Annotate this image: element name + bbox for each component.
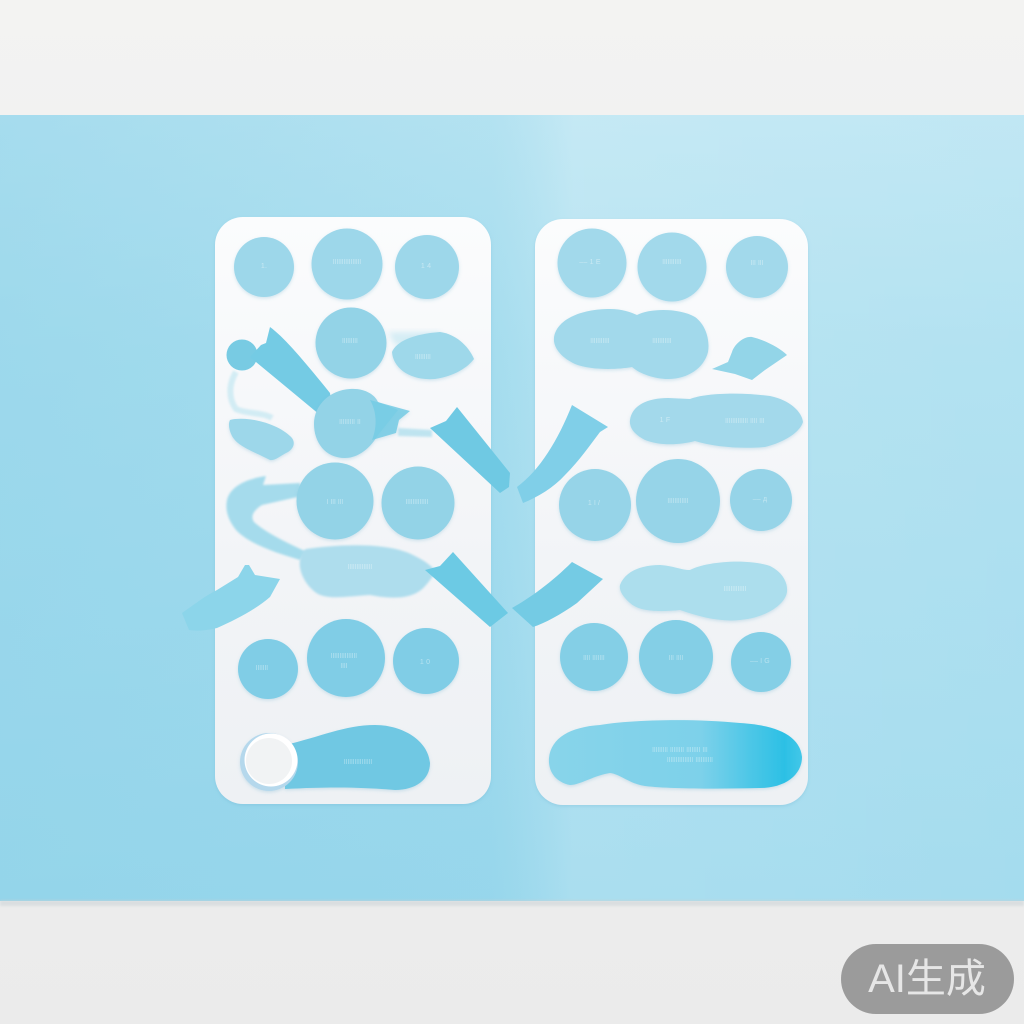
double blob: right card second row bbox=[554, 309, 708, 379]
tail: second row blur bbox=[388, 332, 440, 345]
badge: AI generated bbox=[841, 944, 1014, 1014]
pill with ring: left card bottom bbox=[240, 725, 430, 791]
circles: right card sixth row bbox=[560, 620, 791, 694]
leaf shape: left card second row bbox=[392, 332, 474, 379]
labels: right card fourth row: 1 l / bbox=[588, 500, 600, 507]
labels: left card sixth row: 1 0 bbox=[420, 659, 430, 666]
arrow band: left outer lower bbox=[182, 565, 280, 631]
pale blob: right card fifth row: lllllllllllll bbox=[724, 586, 747, 593]
labels: right card fourth row: –– д bbox=[753, 496, 767, 503]
pale blob: right card fifth row bbox=[620, 562, 787, 620]
circle: left card knob bbox=[226, 340, 258, 370]
labels: left card top row: 1. bbox=[261, 263, 267, 270]
arrow band: centre lower right bbox=[512, 562, 603, 627]
circles: right card top row bbox=[558, 228, 788, 302]
connector: left curled stem bbox=[230, 372, 272, 418]
labels: right card top row: lll lll bbox=[751, 260, 764, 267]
pill with ring: left card bottom: Illlllllllllllll bbox=[344, 759, 372, 766]
small leaf: right card second row bbox=[712, 337, 787, 380]
circles: right card fourth row bbox=[559, 459, 792, 543]
double pill: right card third row bbox=[630, 394, 803, 448]
circles: left card top row bbox=[234, 228, 459, 300]
arrow band: left card upper bbox=[250, 327, 332, 415]
labels: right card sixth row: –– l G bbox=[750, 658, 770, 665]
leaf shape: left card second row: lllllllll bbox=[415, 354, 431, 361]
labels: right card top row bbox=[579, 259, 764, 267]
labels: right card sixth row: llll lllllll bbox=[583, 655, 605, 662]
labels: left card sixth row bbox=[256, 653, 430, 672]
labels: left card fourth row: lllllllllllll bbox=[406, 499, 429, 506]
pale blob: left card fifth row bbox=[300, 545, 436, 598]
banner pill: right card bottom: lllllllllllllll llllllllll bbox=[667, 757, 713, 764]
labels: right card fourth row: llllllllllll bbox=[667, 498, 689, 505]
double pill: right card third row: lllllllllllll llll lll bbox=[725, 418, 765, 425]
badge: AI generated: AI生成 bbox=[868, 957, 986, 1001]
double blob: right card second row: lllllllllll bbox=[590, 338, 610, 345]
circle with tab: left card third row bbox=[314, 389, 410, 458]
double blob: right card second row: lllllllllll bbox=[652, 338, 672, 345]
labels: left card sixth row: lllllll bbox=[256, 665, 268, 672]
panel: right card bbox=[512, 219, 808, 805]
labels: right card sixth row: lll llll bbox=[669, 655, 683, 662]
labels: left card fourth row: l lll lll bbox=[327, 499, 344, 506]
labels: right card sixth row bbox=[583, 655, 770, 665]
tail: third row blur bbox=[398, 428, 432, 437]
circle with tab: left card third row: lllllllll ll bbox=[339, 419, 361, 426]
banner pill: right card bottom: lllllllll llllllll llllllll lll bbox=[652, 747, 708, 754]
swoosh: left card fourth row bbox=[226, 476, 307, 560]
arrow band: centre upper left bbox=[430, 407, 510, 493]
double pill: right card third row: 1 F bbox=[660, 417, 670, 424]
arrow band: centre upper right bbox=[517, 405, 608, 503]
blob: left card third row bbox=[229, 419, 294, 460]
labels: left card top row: 1 4 bbox=[421, 263, 431, 270]
labels: right card top row: lllllllllll bbox=[662, 259, 682, 266]
blue folded sheet bbox=[0, 115, 1024, 906]
circles: left card sixth row bbox=[238, 619, 459, 699]
circle: left card second row: lllllllll bbox=[342, 338, 358, 345]
pale blob: left card fifth row: llllllllllllll bbox=[348, 564, 373, 571]
arrow band: centre lower left bbox=[425, 552, 508, 627]
panel: left card bbox=[182, 217, 510, 804]
labels: right card fourth row bbox=[588, 496, 767, 507]
circles: left card fourth row bbox=[296, 462, 454, 540]
labels: left card top row: Illlllllllllllll bbox=[333, 259, 361, 266]
banner pill: right card bottom bbox=[549, 720, 802, 789]
circle: left card second row bbox=[316, 308, 386, 378]
labels: left card sixth row: llll bbox=[340, 663, 348, 670]
labels: left card fourth row bbox=[327, 499, 429, 506]
labels: right card top row: –– 1 E bbox=[579, 259, 601, 266]
labels: left card sixth row: lllllllllllllll bbox=[331, 653, 357, 660]
labels: left card top row bbox=[261, 259, 431, 270]
